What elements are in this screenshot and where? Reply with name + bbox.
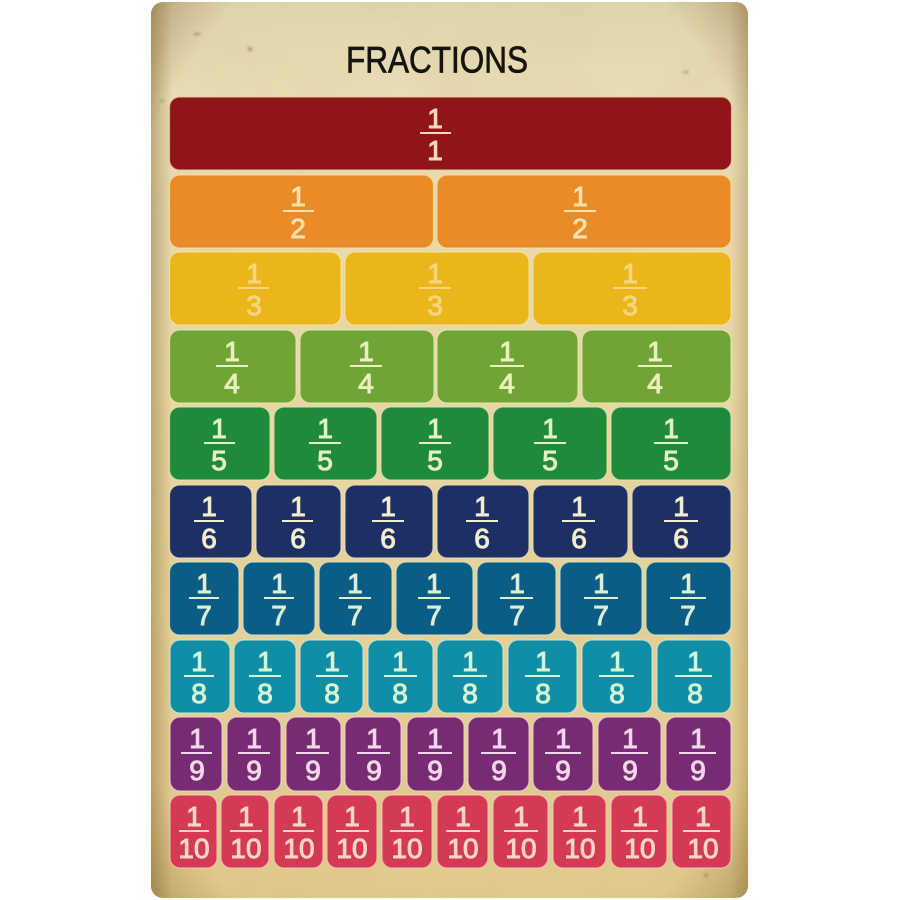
tile: 1/8: 1 [609,646,625,677]
tile: 1/10: 1 [399,801,415,832]
tile: 1/9: 9 [555,755,571,786]
tile: 1/6: 1 [201,491,217,522]
tile: 1/7 [243,562,315,635]
tile: 1/7: 7 [509,600,525,631]
tile: 1/9: 9 [366,755,382,786]
tile: 1/9: 1 [622,723,638,754]
tile: 1/3: 1 [622,258,638,289]
tile: 1/9: 9 [690,755,706,786]
tile: 1/8 [508,640,577,713]
tile: 1/2 [170,175,434,248]
tile: 1/4: 4 [499,368,515,399]
tile: 1/3: 1 [246,258,262,289]
tile: 1/10: 1 [291,801,307,832]
tile: 1/7: 7 [426,600,442,631]
tile: 1/2 [437,175,731,248]
tile: 1/9 [286,717,341,791]
tile: 1/10 [672,795,731,868]
tile: 1/5: 1 [317,413,333,444]
tile: 1/10: 1 [695,801,711,832]
tile: 1/6: 1 [474,491,490,522]
tile: 1/6: 6 [290,523,306,554]
tile: 1/10: 1 [238,801,254,832]
tile: 1/9: 1 [305,723,321,754]
tile: 1/4 [582,330,731,403]
tile: 1/3: 3 [246,290,262,321]
row: ninths [170,717,731,791]
tile: 1/6: 6 [571,523,587,554]
tile: 1/10: 10 [564,833,596,864]
tile: 1/5: 5 [542,445,558,476]
tile: 1/8: 8 [535,678,551,709]
tile: 1/10: 1 [344,801,360,832]
tile: 1/8: 1 [191,646,207,677]
tile: 1/7: 7 [196,600,212,631]
tile: 1/6 [256,485,341,558]
tile: 1/10 [553,795,606,868]
tile: 1/10 [437,795,488,868]
tile: 1/5: 5 [211,445,227,476]
tile: 1/5: 1 [542,413,558,444]
tile: 1/4: 4 [358,368,374,399]
tile: 1/9: 9 [427,755,443,786]
tile: 1/4: 4 [224,368,240,399]
tile: 1/6 [533,485,628,558]
tile: 1/7: 7 [680,600,696,631]
tile: 1/2: 2 [290,213,306,244]
row: sevenths [170,562,731,635]
row: one whole [170,97,732,170]
tile: 1/5 [274,407,377,480]
tile: 1/10: 1 [455,801,471,832]
tile: 1/10: 1 [572,801,588,832]
tile: 1/9: 1 [366,723,382,754]
tile: 1/8 [437,640,503,713]
tile: 1/9 [533,717,593,791]
row: halves [170,175,731,248]
tile: 1/10: 10 [447,833,479,864]
tile: 1/10: 10 [283,833,315,864]
tile: 1/8: 1 [462,646,478,677]
tile: 1/6 [345,485,433,558]
tile: 1/8 [657,640,731,713]
row: eighths [170,640,731,713]
tile: 1/9: 1 [427,723,443,754]
tile: 1/7 [396,562,473,635]
tile: 1/7: 1 [593,568,609,599]
tile: 1/7: 1 [196,568,212,599]
row: tenths [170,795,731,868]
tile: 1/7: 7 [271,600,287,631]
tile: 1/9 [598,717,661,791]
tile: 1/10: 1 [186,801,202,832]
tile: 1/4: 4 [647,368,663,399]
tile: 1/10: 10 [230,833,262,864]
tile: 1/9 [407,717,464,791]
tile: 1/8: 8 [191,678,207,709]
tile: 1/7: 7 [347,600,363,631]
tile: 1/4: 1 [647,336,663,367]
row: quarters [170,330,731,403]
tile: 1/10: 10 [178,833,210,864]
tile: 1/10 [274,795,323,868]
tile: 1/4: 1 [224,336,240,367]
tile: 1/10: 10 [505,833,537,864]
tile: 1/5 [170,407,270,480]
tile: 1/9 [170,717,222,791]
tile: 1/1 [170,97,732,170]
tile: 1/6: 1 [673,491,689,522]
tile: 1/2: 1 [572,181,588,212]
tile: 1/6: 1 [571,491,587,522]
tile: 1/7: 1 [426,568,442,599]
tile: 1/3: 3 [427,290,443,321]
tile: 1/7 [170,562,239,635]
row: thirds [170,252,731,325]
tile: 1/9: 1 [690,723,706,754]
tile: 1/6: 1 [290,491,306,522]
tile: 1/8: 8 [687,678,703,709]
tile: 1/7 [477,562,556,635]
tile: 1/9: 1 [555,723,571,754]
tile: 1/9 [345,717,401,791]
tile: 1/8 [170,640,230,713]
tile: 1/6 [170,485,252,558]
tile: 1/6: 6 [380,523,396,554]
tile: 1/4 [170,330,296,403]
tile: 1/5: 1 [663,413,679,444]
tile: 1/9: 9 [246,755,262,786]
tile: 1/7: 1 [509,568,525,599]
tile: 1/6: 6 [474,523,490,554]
tile: 1/10: 10 [687,833,719,864]
tile: 1/8 [234,640,296,713]
tile: 1/8 [300,640,363,713]
tile: 1/5: 1 [211,413,227,444]
tile: 1/3 [170,252,341,325]
tile: 1/7: 1 [680,568,696,599]
tile: 1/5: 1 [427,413,443,444]
tile: 1/9 [468,717,529,791]
tile: 1/10: 10 [336,833,368,864]
tile: 1/6: 6 [201,523,217,554]
row: fifths [170,407,731,480]
tile: 1/10: 10 [624,833,656,864]
tile: 1/8: 8 [392,678,408,709]
tile: 1/6: 6 [673,523,689,554]
panel: aged paper poster background [151,2,748,898]
tile: 1/3 [345,252,529,325]
tile: 1/1: 1 [427,103,443,134]
tile: 1/6 [632,485,731,558]
tile: 1/5 [611,407,731,480]
tile: 1/6: 1 [380,491,396,522]
tile: 1/9: 1 [189,723,205,754]
tile: 1/4: 1 [499,336,515,367]
tile: 1/6 [437,485,529,558]
tile: 1/7: 7 [593,600,609,631]
tile: 1/4 [437,330,578,403]
tile: 1/2: 1 [290,181,306,212]
tile: 1/10: 10 [391,833,423,864]
tile: 1/5 [493,407,607,480]
tile: 1/9: 9 [491,755,507,786]
title: FRACTIONS [346,40,528,80]
row: sixths [170,485,731,558]
tile: 1/5: 5 [317,445,333,476]
tile: 1/8: 8 [609,678,625,709]
tile: 1/10: 1 [513,801,529,832]
tile: 1/10 [493,795,548,868]
tile: 1/10 [327,795,377,868]
tile: 1/8: 1 [257,646,273,677]
tile: 1/5: 5 [663,445,679,476]
tile: 1/4: 1 [358,336,374,367]
tile: 1/4 [300,330,434,403]
tile: 1/8 [582,640,652,713]
tile: 1/9: 1 [246,723,262,754]
tile: 1/7: 1 [347,568,363,599]
tile: 1/2: 2 [572,213,588,244]
tile: 1/8: 8 [324,678,340,709]
tile: 1/10 [611,795,667,868]
tile: 1/8: 1 [392,646,408,677]
tile: 1/10 [221,795,269,868]
tile: 1/3: 3 [622,290,638,321]
tile: 1/10 [170,795,217,868]
tile: 1/9: 9 [622,755,638,786]
tile: 1/9: 9 [189,755,205,786]
tile: 1/8: 8 [462,678,478,709]
tile: 1/8: 1 [535,646,551,677]
tile: 1/8: 8 [257,678,273,709]
tile: 1/9: 9 [305,755,321,786]
tile: 1/9: 1 [491,723,507,754]
tile: 1/7: 1 [271,568,287,599]
tile: 1/8 [368,640,433,713]
tile: 1/10 [382,795,432,868]
tile: 1/3 [533,252,731,325]
tile: 1/9 [227,717,281,791]
tile: 1/5 [381,407,489,480]
tile: 1/8: 1 [687,646,703,677]
tile: 1/9 [666,717,731,791]
tile: 1/7 [319,562,392,635]
tile: 1/1: 1 [427,135,443,166]
tile: 1/10: 1 [632,801,648,832]
tile: 1/7 [560,562,642,635]
tile: 1/7 [646,562,731,635]
tile: 1/8: 1 [324,646,340,677]
tile: 1/5: 5 [427,445,443,476]
tile: 1/3: 1 [427,258,443,289]
